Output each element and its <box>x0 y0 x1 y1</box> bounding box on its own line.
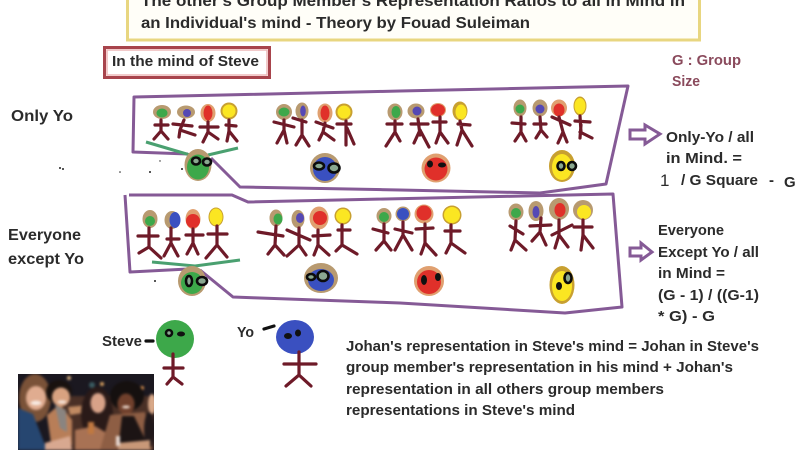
formula: Everyone except Yo ratio: in Mind = <box>658 265 725 282</box>
title box <box>128 0 700 40</box>
explanation text: Johan's representation in Steve's mind = Johan in Steve's <box>346 338 759 355</box>
formula: Everyone except Yo ratio <box>658 222 759 325</box>
formula: Only-Yo ratio: 1 <box>660 171 669 190</box>
explanation text: representation in all others group members <box>346 381 664 398</box>
label: In the mind of Steve <box>104 48 270 78</box>
photo: group of friends <box>18 374 156 450</box>
arrow: Everyone except Yo result <box>630 243 652 260</box>
big heads: Only Yo row <box>146 142 576 183</box>
formula: Only-Yo ratio: in Mind. = <box>666 150 742 167</box>
legend: G group size <box>672 53 741 90</box>
row label: Only Yo: Only Yo <box>11 108 73 125</box>
formula: Only-Yo ratio: / G Square <box>681 172 758 189</box>
legend: G group size: G : Group <box>672 53 741 69</box>
figure: Steve <box>102 320 194 384</box>
figure: Yo: Yo <box>237 324 254 341</box>
legend: G group size: Size <box>672 74 700 90</box>
figures: Only Yo row <box>153 96 592 147</box>
formula: Everyone except Yo ratio: Except Yo / all <box>658 244 759 261</box>
explanation text <box>346 338 759 419</box>
formula: Only-Yo ratio: Only-Yo / all <box>666 129 754 146</box>
row label: Everyone except Yo: except Yo <box>8 251 84 268</box>
formula: Only-Yo ratio: G <box>784 174 796 191</box>
formula: Everyone except Yo ratio: * G) - G <box>658 308 715 325</box>
figures: Everyone except Yo row <box>138 198 593 258</box>
outline: Only Yo panel <box>133 86 628 193</box>
row label: Everyone except Yo: Everyone <box>8 227 81 244</box>
label: In the mind of Steve: In the mind of Steve <box>112 54 259 70</box>
arrow: Only Yo result <box>630 125 660 144</box>
explanation text: group member's representation in his mind + Johan's <box>346 359 733 376</box>
explanation text: representations in Steve's mind <box>346 402 575 419</box>
stray specks <box>59 160 183 282</box>
formula: Everyone except Yo ratio: (G - 1) / ((G-1) <box>658 287 759 304</box>
big heads: Everyone except Yo row <box>152 260 574 304</box>
formula: Only-Yo ratio: - <box>769 172 774 189</box>
outline: Everyone except Yo panel <box>125 194 622 313</box>
formula: Everyone except Yo ratio: Everyone <box>658 222 724 239</box>
formula: Only-Yo ratio <box>660 129 796 191</box>
figure: Yo <box>237 320 316 386</box>
title box: an Individual's mind - Theory by Fouad Suleiman <box>141 15 530 32</box>
row label: Everyone except Yo <box>8 227 84 268</box>
figure: Steve: Steve <box>102 333 142 350</box>
